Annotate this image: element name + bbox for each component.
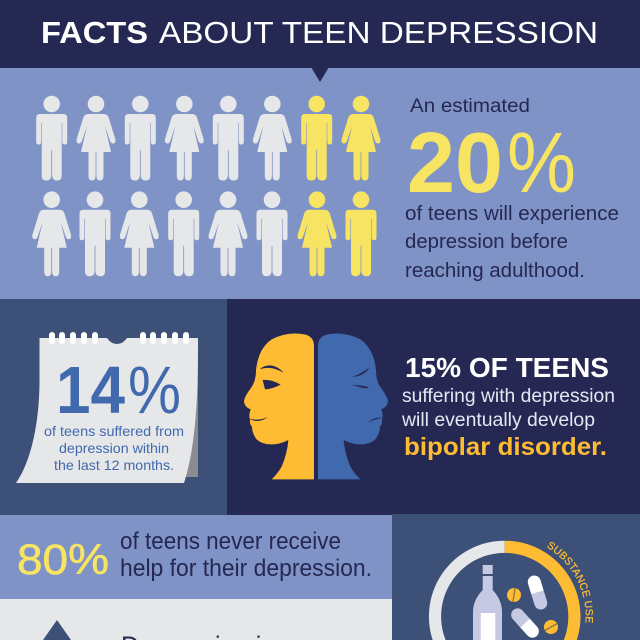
text: will experience depression: of teens will experience (405, 202, 619, 225)
text: suffered within 12 months: depression within (59, 440, 169, 456)
text: suffered within 12 months (44, 423, 184, 473)
panel: 80% never receive help (0, 515, 392, 599)
stat: 80%: 80% (17, 536, 109, 584)
heading: 15% of teens: 15% OF TEENS (405, 352, 609, 383)
chart: substance use ring (429, 541, 580, 640)
stat: 14%: % (128, 353, 181, 428)
text: bipolar disorder: bipolar disorder. (404, 433, 607, 461)
panel: 20% of teens (0, 67, 640, 299)
icon: bottle (473, 565, 502, 640)
text: suffered within 12 months: the last 12 months. (54, 457, 174, 473)
text: suffering with depression: suffering with depression (402, 386, 615, 407)
text: will experience depression: reaching adulthood. (405, 259, 585, 282)
panel: substance use (392, 514, 640, 640)
icon: two-sided face (244, 333, 388, 479)
panel: substance use: SUBSTANCE USE (548, 542, 594, 623)
stat: 20%: 20 (407, 116, 503, 211)
icon: warning triangle (43, 620, 71, 640)
stat: 14%: 14 (56, 353, 125, 428)
text: will experience depression (405, 202, 619, 282)
title: FACTS (41, 15, 148, 50)
label: substance use (546, 547, 586, 633)
icon: calendar page (16, 332, 198, 483)
icon: pills (507, 574, 558, 640)
text: suffering with depression: will eventually develop (401, 410, 595, 431)
text: an estimated: An estimated (410, 96, 530, 117)
text: suffering with depression (401, 386, 615, 431)
panel: 15% bipolar (227, 299, 640, 515)
text: never receive help (120, 528, 372, 582)
text: never receive help: of teens never receive (120, 528, 341, 555)
stat: 20%: % (507, 116, 576, 211)
pictogram: teens, row 1 (36, 96, 380, 180)
header banner (0, 0, 640, 68)
pointer arrow (311, 67, 329, 82)
text: suffered within 12 months: of teens suffered from (44, 423, 184, 439)
text: will experience depression: depression before (405, 230, 568, 253)
panel: depression is (43, 620, 274, 640)
title: ABOUT TEEN DEPRESSION (159, 15, 598, 50)
panel: 14% calendar (0, 299, 227, 515)
text: never receive help: help for their depression. (120, 555, 372, 582)
pictogram: teens, row 2 (32, 191, 376, 276)
